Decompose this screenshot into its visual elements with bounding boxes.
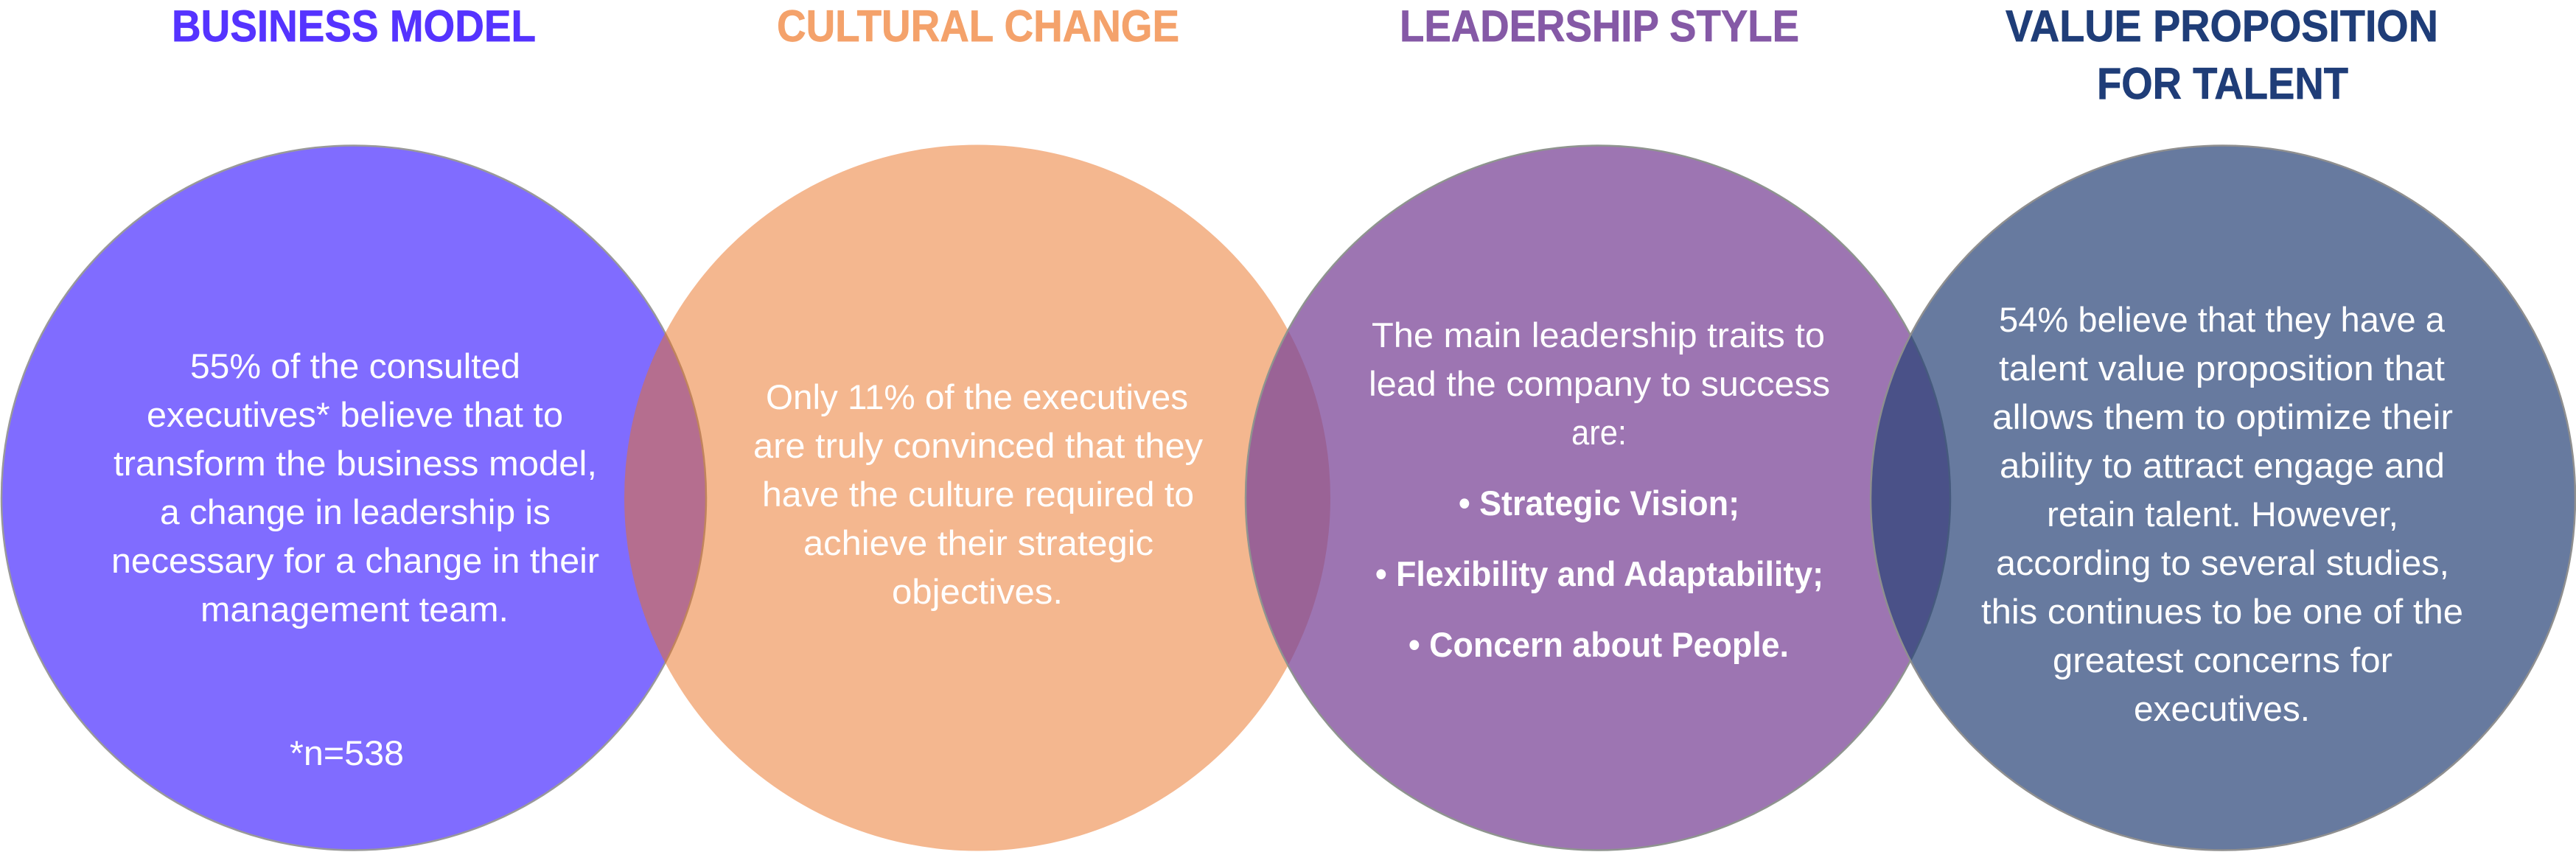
text block: leadership style intro: The main leadership traits to bbox=[1372, 316, 1825, 355]
text block: value proposition for talent: retain talent. However, bbox=[2047, 495, 2398, 534]
list: leadership traits bbox=[1375, 484, 1823, 665]
text block: value proposition for talent: allows them to optimize their bbox=[1992, 398, 2453, 437]
text block: leadership style intro: lead the company to success bbox=[1369, 365, 1830, 404]
text block: value proposition for talent: executives. bbox=[2134, 690, 2310, 729]
heading: value proposition for talent: VALUE PROPOSITION bbox=[2006, 1, 2438, 51]
text block: value proposition for talent: 54% believe that they have a bbox=[1999, 301, 2446, 340]
circle: business model bbox=[1, 146, 706, 851]
text block: cultural change: are truly convinced that they bbox=[753, 427, 1203, 466]
heading: business model: BUSINESS MODEL bbox=[172, 1, 536, 51]
text block: business model: necessary for a change in their bbox=[111, 542, 599, 581]
text block: value proposition for talent bbox=[1981, 301, 2463, 729]
text block: value proposition for talent: this continues to be one of the bbox=[1981, 593, 2463, 632]
text block: business model: executives* believe that to bbox=[147, 396, 563, 435]
text block: cultural change: achieve their strategic bbox=[803, 524, 1153, 563]
text block: cultural change: Only 11% of the executives bbox=[766, 378, 1188, 417]
list: leadership traits: • Concern about People. bbox=[1409, 626, 1789, 665]
text block: business model: transform the business model, bbox=[114, 444, 597, 483]
text block: cultural change: objectives. bbox=[892, 573, 1063, 612]
text block: value proposition for talent: greatest concerns for bbox=[2053, 641, 2392, 680]
text block: leadership style intro: are: bbox=[1571, 413, 1627, 453]
heading: value proposition for talent: FOR TALENT bbox=[2097, 59, 2348, 108]
heading: leadership style: LEADERSHIP STYLE bbox=[1400, 1, 1799, 51]
text block: business model: management team. bbox=[200, 590, 509, 629]
list: leadership traits: • Flexibility and Adaptability; bbox=[1375, 555, 1823, 594]
text block: value proposition for talent: ability to attract engage and bbox=[2000, 447, 2445, 486]
heading: value proposition for talent bbox=[2006, 1, 2438, 108]
circle: value proposition for talent bbox=[1871, 146, 2575, 851]
text block: business model: a change in leadership is bbox=[160, 493, 551, 532]
text block: cultural change bbox=[753, 378, 1203, 612]
text block: leadership style intro bbox=[1369, 316, 1830, 453]
text block: value proposition for talent: according to several studies, bbox=[1996, 544, 2449, 583]
text block: value proposition for talent: talent value proposition that bbox=[1999, 349, 2445, 388]
circle: leadership style bbox=[1246, 146, 1950, 851]
circle: cultural change bbox=[624, 144, 1330, 851]
footnote: sample size: *n=538 bbox=[290, 734, 404, 773]
text block: business model: 55% of the consulted bbox=[190, 347, 520, 386]
text block: cultural change: have the culture required to bbox=[762, 475, 1194, 514]
heading: cultural change: CULTURAL CHANGE bbox=[777, 1, 1179, 51]
text block: business model bbox=[111, 347, 599, 629]
list: leadership traits: • Strategic Vision; bbox=[1459, 484, 1739, 523]
